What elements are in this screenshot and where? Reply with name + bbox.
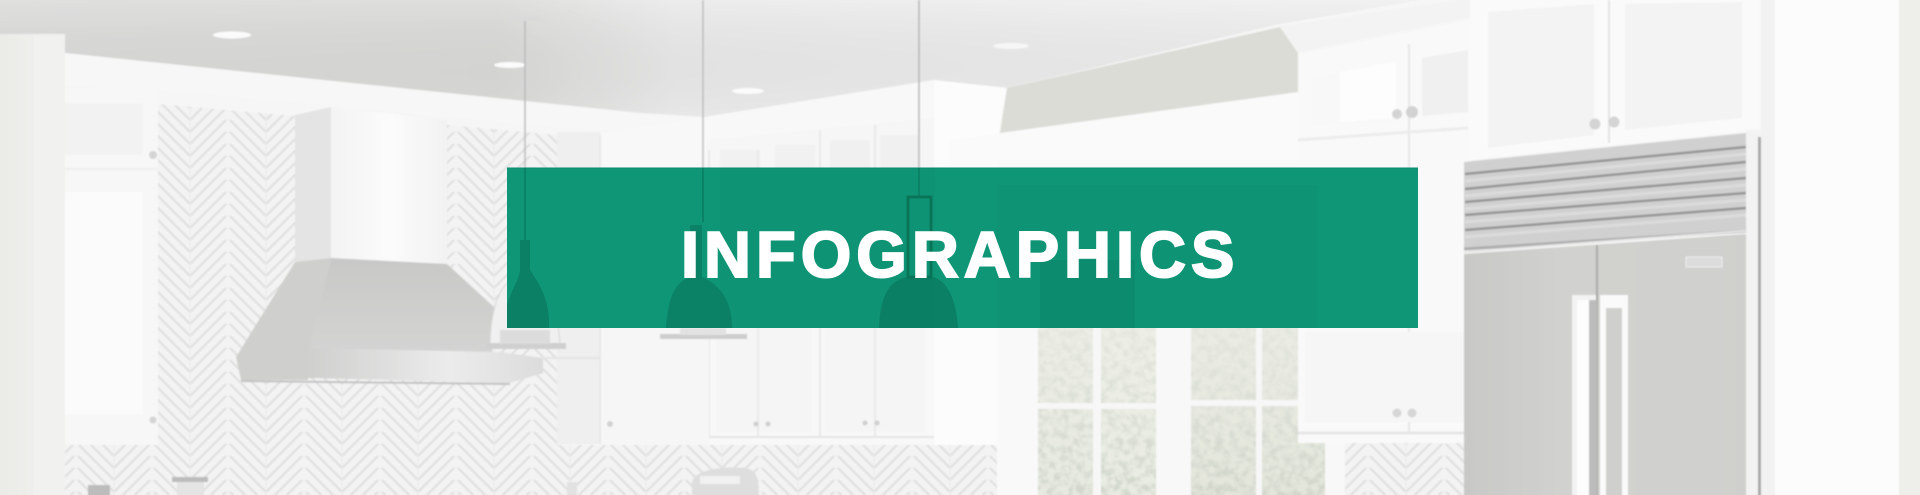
green title band (507, 168, 1418, 328)
shelf line (540, 357, 600, 359)
range hood (236, 107, 543, 384)
pendant lamp right (918, 0, 920, 197)
ceiling (0, 0, 1480, 117)
right wall (1761, 0, 1920, 495)
left cabinet (65, 88, 158, 445)
handles (1572, 295, 1628, 495)
left wall and pillar (0, 34, 65, 495)
countertop items (88, 477, 577, 495)
crown moulding (950, 92, 1300, 175)
middle cabinets (600, 80, 935, 445)
refrigerator (1464, 130, 1761, 495)
doors (1464, 234, 1746, 495)
title: INFOGRAPHICS (681, 218, 1239, 291)
band: reflections of pendants and cabinets (507, 168, 1418, 328)
soffit beam over the hood (65, 53, 705, 135)
upper cabinets over refrigerator (1470, 0, 1760, 160)
tile under right cabinets (1325, 443, 1465, 495)
white column with crown (934, 80, 1007, 445)
right cabinets (1280, 0, 1475, 443)
beige soffit (1000, 27, 1298, 133)
recessed ceiling lights (213, 32, 1029, 94)
alcove (557, 132, 601, 444)
window panes (1038, 270, 1325, 495)
pendant lamp middle (660, 0, 747, 339)
stand mixer (692, 468, 759, 495)
pendant lamp left (486, 16, 566, 349)
grille (1464, 133, 1756, 252)
herringbone backsplash (65, 104, 1000, 495)
window frame (997, 160, 1300, 495)
side trim (1746, 130, 1760, 495)
